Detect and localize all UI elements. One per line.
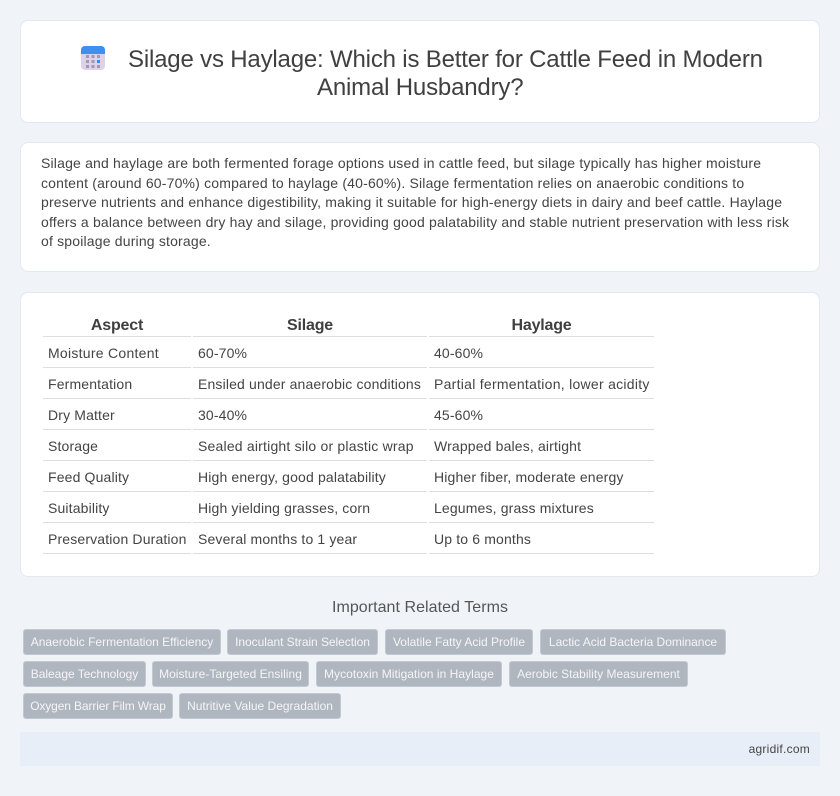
comparison panel: Silage xyxy=(287,317,333,334)
title: Silage vs Haylage: Which is Better for Cattle Feed in Modern xyxy=(128,46,763,73)
intro text: preserve nutrients and enhance digestibility, making it suitable for high-energy diets in dairy and beef cattle. Haylage xyxy=(41,194,782,210)
comparison panel: Haylage xyxy=(512,317,571,334)
table rows: 60-70% xyxy=(198,345,247,361)
related terms tags: Baleage Technology xyxy=(31,667,138,681)
comparison panel: Aspect xyxy=(91,317,143,334)
related terms tags: Oxygen Barrier Film Wrap xyxy=(30,699,166,713)
table headers xyxy=(91,317,572,334)
table rows: Legumes, grass mixtures xyxy=(434,500,594,516)
table rows: Preservation Duration xyxy=(48,531,187,547)
title: Animal Husbandry? xyxy=(317,74,523,101)
table rows: Partial fermentation, lower acidity xyxy=(434,376,650,392)
footer xyxy=(20,732,820,766)
table rows: Storage xyxy=(48,438,98,454)
intro text xyxy=(41,155,789,249)
intro text: of spoilage during storage. xyxy=(41,233,211,249)
related terms tags: Lactic Acid Bacteria Dominance xyxy=(549,635,717,649)
intro panel xyxy=(20,142,820,272)
table rows: Several months to 1 year xyxy=(198,531,357,547)
related terms tags: Aerobic Stability Measurement xyxy=(517,667,680,681)
related terms tags: Moisture-Targeted Ensiling xyxy=(159,667,302,681)
related terms tags: Inoculant Strain Selection xyxy=(235,635,370,649)
table rows: Suitability xyxy=(48,500,110,516)
table rows: High yielding grasses, corn xyxy=(198,500,370,516)
table rows: 30-40% xyxy=(198,407,247,423)
table rows: Sealed airtight silo or plastic wrap xyxy=(198,438,414,454)
header card xyxy=(20,20,820,123)
title xyxy=(128,46,763,101)
table rows: Up to 6 months xyxy=(434,531,531,547)
table rows: 45-60% xyxy=(434,407,483,423)
table rows: Wrapped bales, airtight xyxy=(434,438,581,454)
related terms tags: Volatile Fatty Acid Profile xyxy=(393,635,525,649)
related terms tags: Mycotoxin Mitigation in Haylage xyxy=(324,667,494,681)
related terms heading: Important Related Terms xyxy=(332,599,508,616)
related terms tags xyxy=(23,629,726,719)
related terms tags: Nutritive Value Degradation xyxy=(187,699,333,713)
table rows: 40-60% xyxy=(434,345,483,361)
related terms tags: Anaerobic Fermentation Efficiency xyxy=(31,635,213,649)
table rows: Dry Matter xyxy=(48,407,115,423)
table rows: Fermentation xyxy=(48,376,132,392)
intro text: Silage and haylage are both fermented forage options used in cattle feed, but silage typically has higher moisture xyxy=(41,155,761,171)
intro text: content (around 60-70%) compared to haylage (40-60%). Silage fermentation relies on anaerobic conditions to xyxy=(41,175,744,191)
intro text: offers a balance between dry hay and silage, providing good palatability and stable nutrient preservation with less risk xyxy=(41,214,789,230)
table rows: Higher fiber, moderate energy xyxy=(434,469,624,485)
table rows: Ensiled under anaerobic conditions xyxy=(198,376,421,392)
table rows: High energy, good palatability xyxy=(198,469,386,485)
comparison panel xyxy=(20,292,820,577)
table rows: Moisture Content xyxy=(48,345,159,361)
table rows: Feed Quality xyxy=(48,469,129,485)
source credit: agridif.com xyxy=(749,742,810,756)
icon: calendar xyxy=(81,46,105,70)
